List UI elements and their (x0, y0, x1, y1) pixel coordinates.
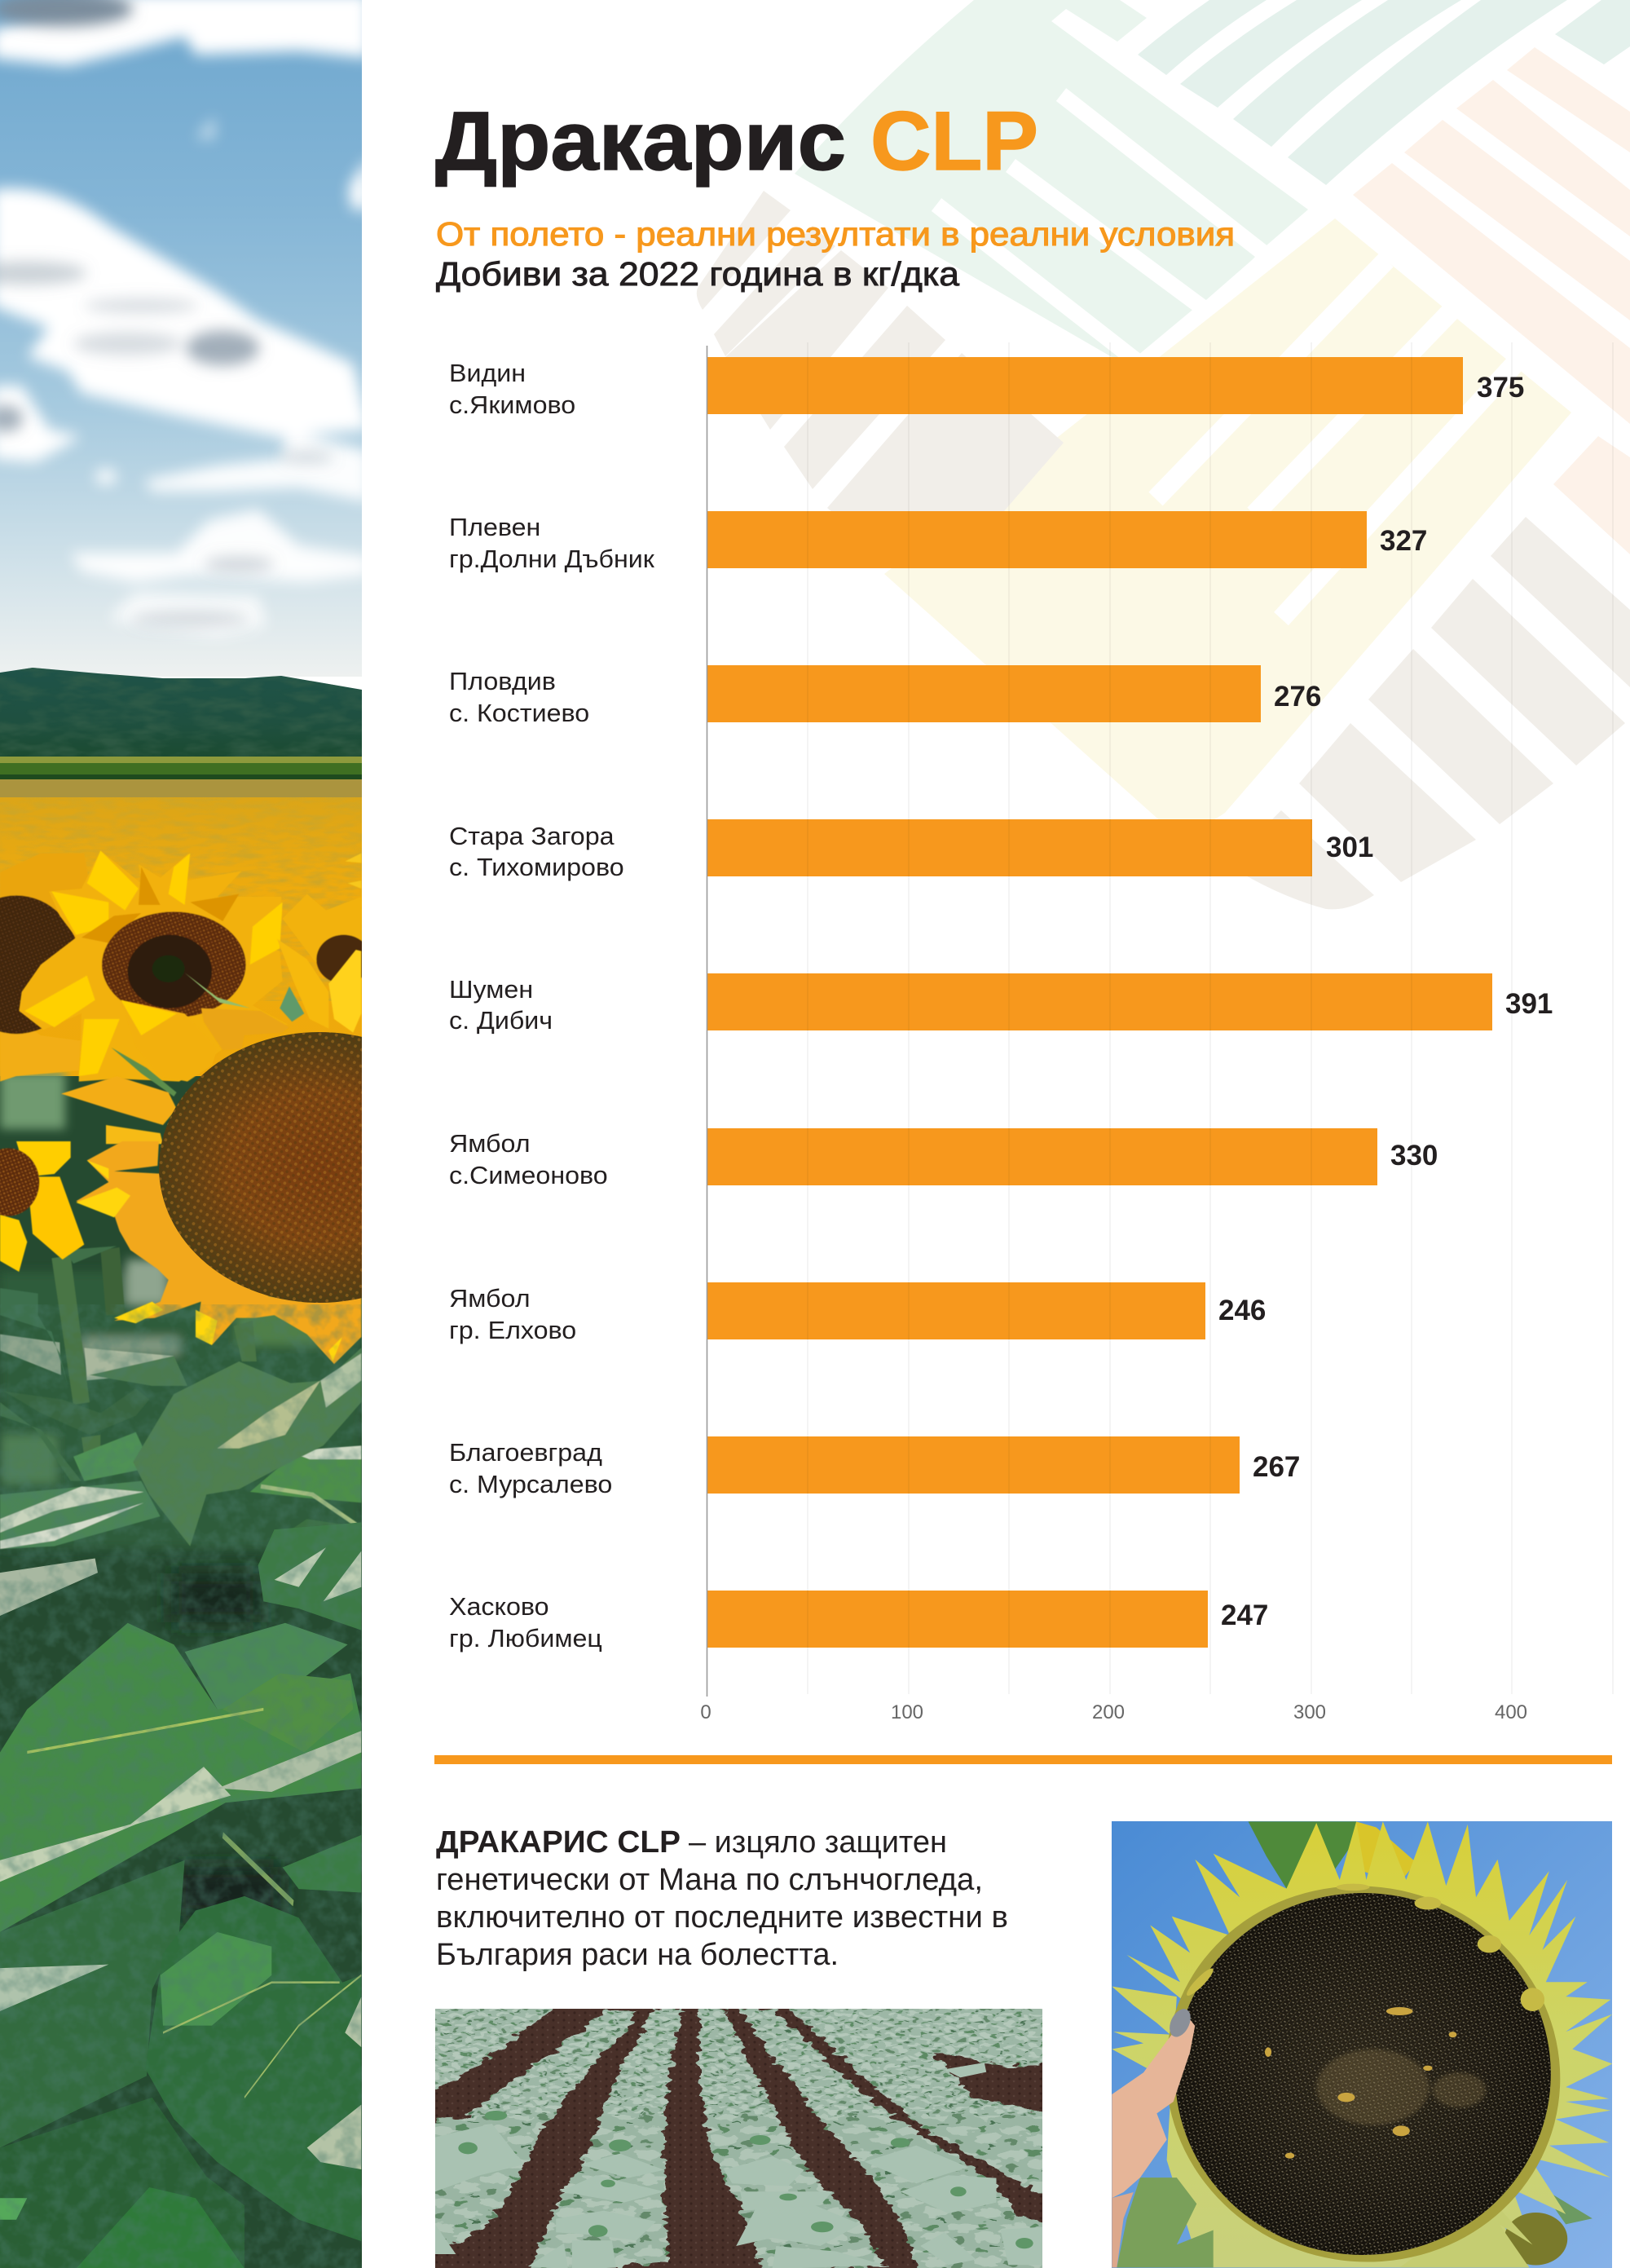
hand (1112, 2006, 1195, 2267)
seed disk ring (1139, 1864, 1588, 2268)
pattern: peach fields (1353, 47, 1630, 554)
lower petals over small flower (1399, 2201, 1532, 2267)
lower-left leaf (1117, 2178, 1214, 2267)
tree line (0, 664, 362, 758)
value labels: 391 (1505, 988, 1553, 1020)
sunflower: middle (19, 850, 288, 1082)
value labels: 246 (1218, 1295, 1266, 1326)
green foliage background (0, 1072, 362, 2268)
value labels: 247 (1221, 1600, 1268, 1631)
category labels: Пловдив (449, 667, 556, 695)
sunflower: right, partly cropped (283, 854, 371, 984)
clouds (0, 0, 369, 637)
axis tick labels (700, 1701, 1527, 1723)
category labels: гр.Долни Дъбник (449, 545, 654, 573)
horizontal bar chart: yields by location (449, 342, 1613, 1723)
value labels: 301 (1326, 832, 1373, 863)
plant centres (458, 2111, 1033, 2248)
leaves: upper (133, 1348, 361, 1549)
photo: sunflower field (left column) (0, 0, 362, 2268)
category labels: Ямбол (449, 1284, 531, 1313)
pattern: teal fields (1138, 0, 1630, 185)
category labels: с. Тихомирово (449, 853, 624, 881)
sky (0, 0, 362, 677)
category labels: с. Мурсалево (449, 1470, 612, 1498)
background small flower (1504, 2213, 1567, 2265)
category labels: Хасково (449, 1592, 549, 1621)
value labels: 327 (1380, 525, 1427, 557)
text block: product description (436, 1825, 1008, 1972)
category labels: с.Симеоново (449, 1161, 608, 1189)
title (435, 95, 1038, 188)
category labels: Плевен (449, 513, 540, 541)
photo: ripe sunflower head held in hand (1112, 1821, 1612, 2268)
pattern: green fields (795, 0, 1308, 367)
background leaf (1249, 1821, 1593, 2224)
category labels: гр. Елхово (449, 1316, 576, 1344)
foreground plants (435, 2124, 1042, 2268)
leaves: lower (0, 1522, 361, 2268)
axis tick labels: 400 (1495, 1701, 1527, 1723)
category labels (449, 359, 654, 1652)
category labels: гр. Любимец (449, 1624, 602, 1652)
title: product name: Дракарис (435, 95, 846, 188)
ring pollen clusters (1183, 1884, 1544, 2011)
sunflower: large foreground seed disk (159, 1032, 480, 1303)
value labels (1218, 372, 1553, 1631)
axis tick labels: 300 (1293, 1701, 1326, 1723)
category labels: с. Дибич (449, 1006, 553, 1035)
orange divider rule (434, 1755, 1612, 1764)
seed disk (1175, 1893, 1551, 2255)
category labels: с. Костиево (449, 699, 589, 727)
category labels: Благоевград (449, 1438, 602, 1467)
category labels: с.Якимово (449, 391, 575, 419)
subtitle: orange: От полето - реални резултати в реални условия (436, 215, 1235, 253)
sunflower: large foreground petals (61, 939, 361, 1144)
background pattern: stylised fields (697, 0, 1630, 909)
axis tick labels: 100 (891, 1701, 923, 1723)
axis tick labels: 0 (700, 1701, 711, 1723)
far field strips (0, 757, 362, 799)
title: CLP: CLP (870, 95, 1038, 188)
sunflower field (0, 797, 362, 1107)
sunflower: left, partly cropped (0, 854, 92, 1082)
value labels: 375 (1477, 372, 1524, 404)
plant in soil patch (945, 2063, 986, 2077)
subtitle: black: Добиви за 2022 година в кг/дка (436, 255, 959, 293)
category labels: Стара Загора (449, 822, 615, 850)
text block: product description: България раси на болестта. (436, 1938, 839, 1972)
pattern: taupe fields (697, 191, 1630, 909)
axis tick labels: 200 (1092, 1701, 1125, 1723)
sunflower: small lower left (0, 1141, 84, 1272)
category labels: Ямбол (449, 1129, 531, 1158)
value labels: 330 (1390, 1140, 1438, 1172)
text block: product description: – изцяло защитен (689, 1825, 947, 1860)
value labels: 276 (1274, 681, 1321, 713)
category labels: Видин (449, 359, 526, 387)
text block: product description: включително от последните известни в (436, 1900, 1008, 1935)
text block: product description: ДРАКАРИС CLP (436, 1825, 681, 1860)
chart axis and grid (707, 342, 1613, 1697)
plant rows (428, 2001, 1068, 2268)
category labels: Шумен (449, 975, 533, 1004)
petals (1112, 1821, 1612, 2267)
stems and leaves under the flowers (0, 1246, 361, 1549)
photo: young sunflower rows (428, 2001, 1068, 2268)
text block: product description: генетически от Мана по слънчогледа, (436, 1863, 983, 1897)
foliage texture overlay (0, 1304, 362, 2268)
chart bars (707, 357, 1492, 1648)
value labels: 267 (1253, 1451, 1300, 1483)
pattern: yellow fields (884, 218, 1571, 831)
